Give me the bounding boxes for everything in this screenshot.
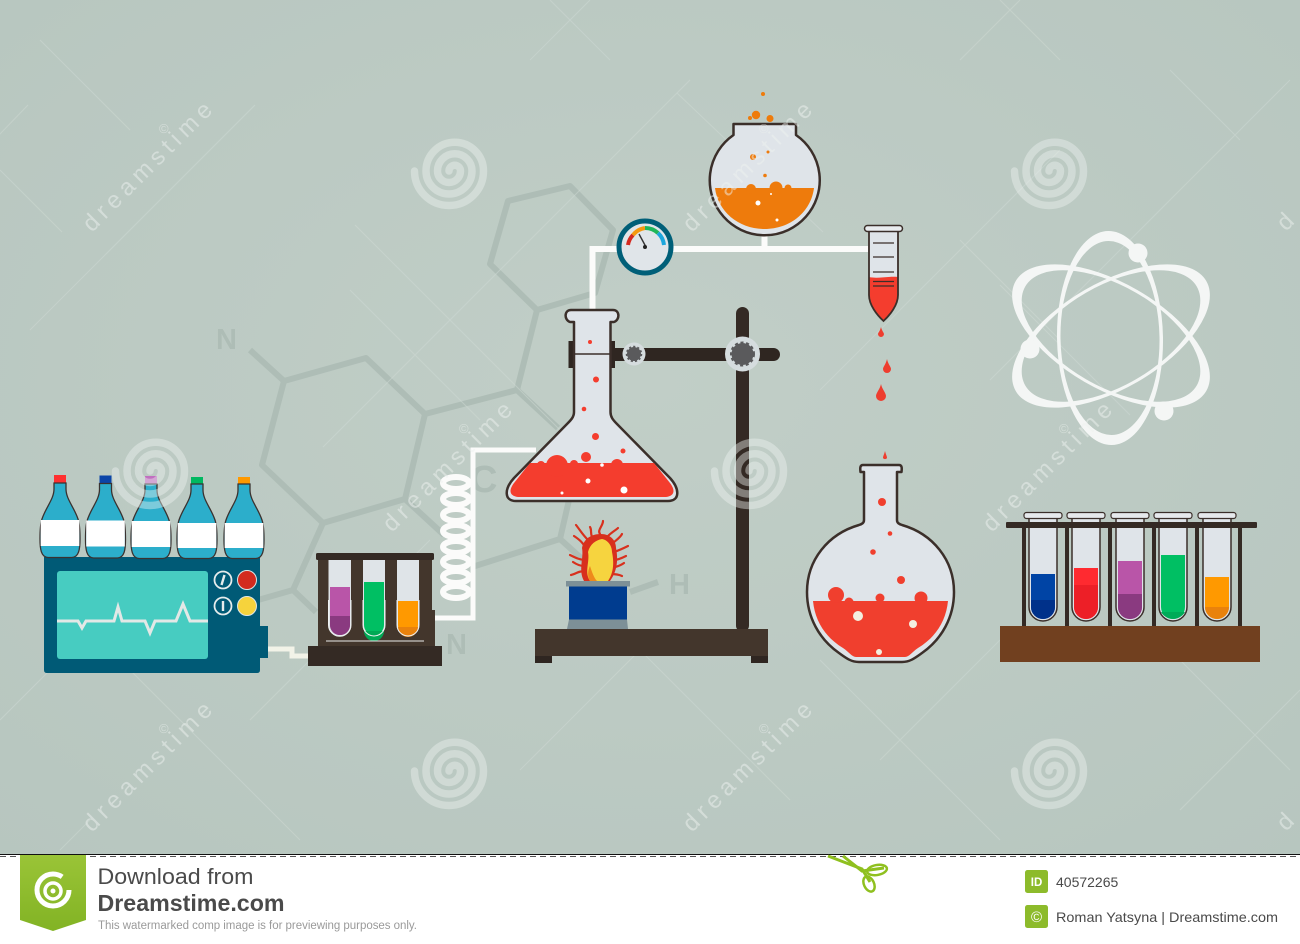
preview note: This watermarked comp image is for previewing purposes only.	[98, 920, 417, 932]
dreamstime.com heading: Dreamstime.com	[98, 890, 284, 916]
watermark text: ©	[459, 421, 469, 436]
watermark text: dreamstime	[677, 97, 818, 237]
watermark text: d	[1271, 808, 1300, 836]
watermark text: ©	[759, 121, 769, 136]
small test tube rack	[308, 553, 442, 666]
molecule background diagram: H	[669, 569, 690, 601]
white coil condenser and tubing	[435, 450, 536, 618]
icon: copyright: ©	[1031, 909, 1042, 926]
watermark spirals	[116, 142, 1084, 805]
author credit: Roman Yatsyna | Dreamstime.com	[1056, 909, 1278, 925]
rack tube green	[363, 560, 385, 641]
large clamp gear	[725, 336, 760, 372]
large round flask with red liquid	[807, 465, 954, 662]
flask bubbles	[828, 498, 928, 606]
connector cable: machine to rack	[268, 649, 308, 656]
machine body	[44, 557, 268, 673]
watermark text: ©	[159, 121, 169, 136]
white pipe: flask to gauge to test tube	[592, 232, 868, 311]
large test tube rack	[1000, 512, 1260, 662]
watermark text: ©	[759, 721, 769, 736]
watermark text: dreamstime	[677, 697, 818, 837]
rack tube purple	[1111, 512, 1149, 621]
bottle 3	[131, 476, 171, 558]
red bubbles	[537, 340, 626, 477]
ring stand	[535, 307, 780, 663]
rack tube red	[1067, 512, 1105, 621]
rack tube blue	[1024, 512, 1062, 621]
molecule background diagram: C	[470, 459, 497, 501]
burner	[566, 581, 630, 629]
watermark text: ©	[159, 721, 169, 736]
top round flask with orange liquid	[710, 92, 820, 235]
rack tube purple	[328, 560, 351, 636]
conical flask with red liquid	[507, 310, 677, 501]
orange bubbles	[746, 92, 792, 194]
machine dials and buttons	[214, 570, 256, 616]
download heading: Download from	[98, 864, 254, 889]
bottle 2	[86, 476, 126, 558]
falling red drops	[876, 327, 891, 459]
rack tube orange	[397, 560, 419, 637]
pressure gauge	[619, 221, 671, 273]
machine screen	[57, 571, 208, 659]
molecule background diagram: N	[216, 324, 237, 356]
dreamstime badge	[20, 855, 86, 931]
watermark text: dreamstime	[377, 397, 518, 537]
watermark text	[77, 97, 1300, 837]
bottle 1	[40, 475, 80, 558]
icon: scissors	[828, 856, 888, 893]
watermark text: dreamstime	[77, 697, 218, 837]
rack tube green	[1154, 512, 1192, 621]
atom symbol	[989, 230, 1233, 446]
bottle 5	[224, 477, 264, 558]
footer strip	[0, 854, 1300, 944]
icon: ID: ID	[1031, 877, 1042, 889]
image id: 40572265	[1056, 874, 1119, 890]
molecule background diagram	[216, 186, 690, 661]
small clamp gear	[622, 342, 646, 366]
watermark text: dreamstime	[77, 97, 218, 237]
ECG trace	[57, 604, 208, 633]
graduated test tube with red liquid	[864, 226, 902, 321]
watermark text: d	[1271, 208, 1300, 236]
equipment: monitoring machine	[44, 557, 268, 673]
icon: copyright	[1025, 905, 1048, 928]
molecule background diagram: N	[446, 629, 467, 661]
watermark text: dreamstime	[977, 397, 1118, 537]
bottle 4	[177, 477, 217, 558]
rack tube orange	[1198, 512, 1236, 621]
icon: ID	[1025, 870, 1048, 893]
watermark text: ©	[1059, 421, 1069, 436]
burner flame	[570, 521, 628, 581]
